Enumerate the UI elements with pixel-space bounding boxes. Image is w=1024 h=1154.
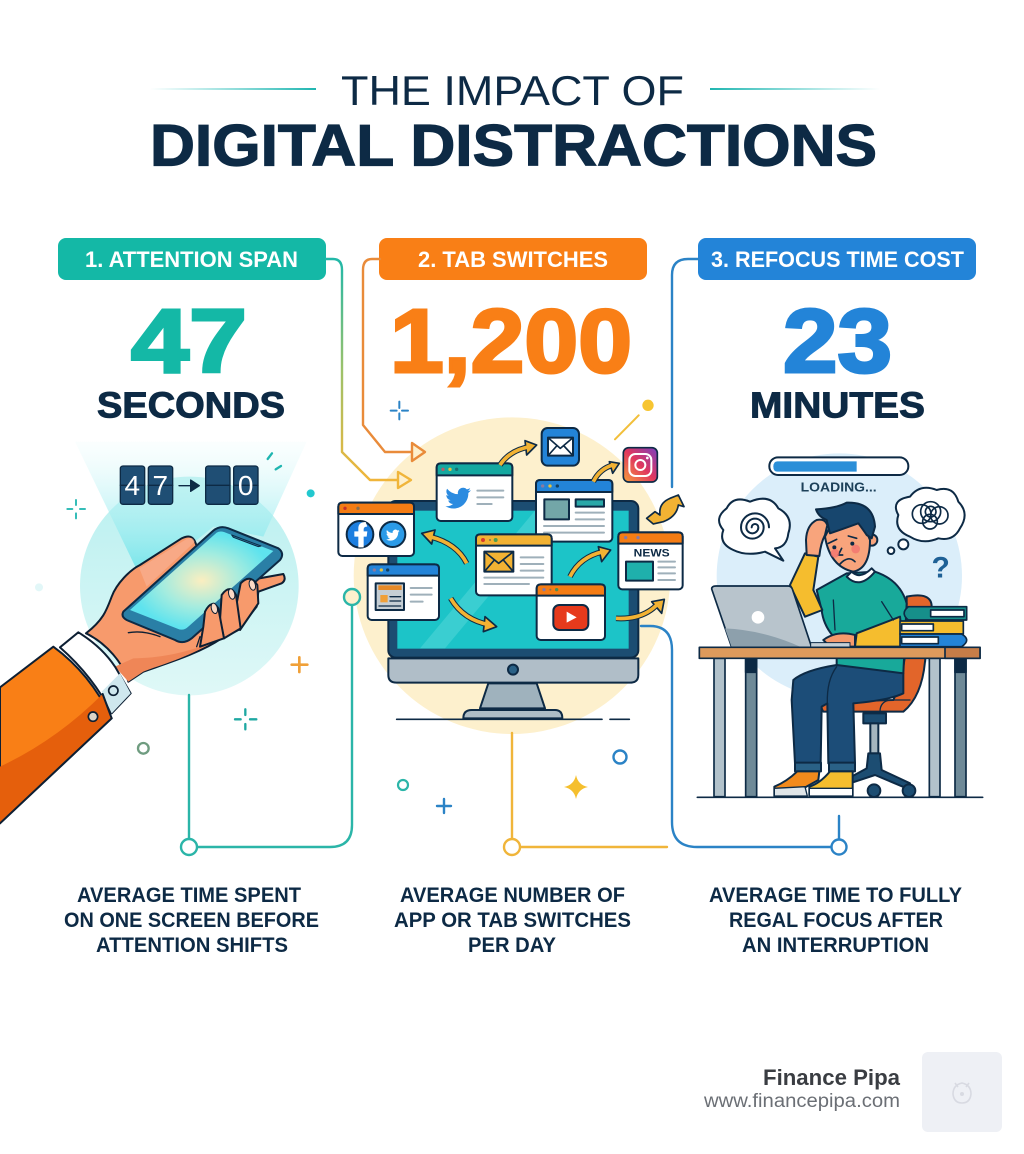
tumbling yellow arrow (647, 495, 684, 524)
blue sparkle (391, 402, 408, 419)
column 2 heading: tab switches: 2. TAB SWITCHES (418, 247, 608, 272)
thought bubble: scribble (888, 488, 965, 554)
window: video (537, 584, 605, 640)
desk (697, 647, 983, 797)
column 1 heading: attention span (58, 238, 326, 280)
loading bar: LOADING... (801, 481, 877, 495)
orange connector from badge 2 (363, 259, 412, 452)
legs and shoes (774, 665, 903, 796)
sparkles and dots (67, 453, 307, 754)
teal connector from phone to caption (189, 605, 352, 847)
instagram icon (623, 448, 657, 482)
illustration: monitor with app windows: NEWS (634, 548, 670, 560)
stat: 23 minutes: 23 (783, 292, 892, 392)
illustration: hand holding phone: 7 (153, 470, 168, 501)
window: news (618, 532, 683, 589)
monitor (388, 501, 638, 719)
column 2 heading: tab switches (379, 238, 647, 280)
mail icon (542, 428, 579, 466)
loading bar (769, 457, 908, 495)
head (816, 503, 877, 572)
stat: 47 seconds: 47 (131, 292, 247, 392)
footer brand (703, 1052, 1002, 1132)
blue circle backdrop (717, 453, 962, 699)
chair (821, 595, 932, 797)
scattered decorations below monitor (398, 750, 626, 813)
window: article with blue header (536, 480, 612, 542)
question mark: ? (932, 551, 950, 584)
stat: 23 minutes (750, 292, 925, 426)
window: twitter (437, 463, 512, 521)
phone (123, 527, 282, 642)
column 3 heading: refocus time cost: 3. REFOCUS TIME COST (711, 247, 965, 272)
caption: attention span (64, 884, 319, 957)
laptop (712, 586, 850, 647)
column 3 heading: refocus time cost (698, 238, 976, 280)
arrowheads (412, 443, 425, 461)
fingers (200, 579, 258, 647)
stat: 47 seconds: SECONDS (97, 384, 285, 426)
window: email (476, 534, 552, 595)
illustration: monitor with app windows (338, 400, 684, 719)
caption: refocus time: AN INTERRUPTION (742, 934, 929, 957)
caption: tab switches: AVERAGE NUMBER OF (400, 884, 625, 907)
illustration: distracted person at desk (697, 453, 983, 797)
window: facebook and twitter (338, 503, 414, 556)
window: document (368, 564, 439, 620)
speech bubble: spiral (719, 499, 790, 561)
column 1 heading: attention span: 1. ATTENTION SPAN (85, 247, 298, 272)
caption: attention span: ON ONE SCREEN BEFORE (64, 909, 319, 932)
caption: attention span: AVERAGE TIME SPENT (77, 884, 301, 907)
caption: refocus time: AVERAGE TIME TO FULLY (709, 884, 962, 907)
caption: tab switches: APP OR TAB SWITCHES (394, 909, 631, 932)
hand (86, 536, 285, 682)
teal-to-yellow connector from badge 1 (326, 259, 398, 480)
sleeve with cuff (0, 632, 131, 823)
title line one: THE IMPACT OF (341, 67, 684, 114)
yellow connector to caption (512, 733, 667, 847)
caption: refocus time (709, 884, 962, 957)
blue connector from badge 3 (672, 259, 698, 487)
stat: 47 seconds (97, 292, 285, 426)
caption: refocus time: REGAL FOCUS AFTER (729, 909, 943, 932)
light beam (75, 442, 307, 583)
title line two: DIGITAL DISTRACTIONS (150, 114, 877, 178)
caption: attention span: ATTENTION SHIFTS (96, 934, 288, 957)
flow arrows between windows (422, 441, 664, 632)
flip counter (120, 466, 258, 504)
caption: tab switches: PER DAY (468, 934, 556, 957)
connector lines (181, 259, 846, 855)
title (150, 67, 880, 178)
yellow circle backdrop behind monitor (354, 417, 670, 734)
illustration: hand holding phone (0, 442, 315, 823)
blue connector to caption (641, 626, 839, 847)
torso and arms (790, 553, 907, 673)
illustration: hand holding phone: 4 (125, 470, 140, 501)
logo tile (922, 1052, 1002, 1132)
teal halo (80, 477, 299, 695)
footer brand: Finance Pipa (763, 1065, 901, 1090)
stat: 23 minutes: MINUTES (750, 384, 925, 426)
hand on head (806, 520, 827, 556)
stat: 1,200: 1,200 (390, 292, 632, 392)
node rings (181, 839, 197, 855)
books (900, 607, 967, 647)
caption: tab switches (394, 884, 631, 957)
footer brand: www.financepipa.com (703, 1091, 900, 1112)
illustration: hand holding phone: 0 (238, 470, 253, 501)
yellow dot with line (615, 400, 654, 439)
